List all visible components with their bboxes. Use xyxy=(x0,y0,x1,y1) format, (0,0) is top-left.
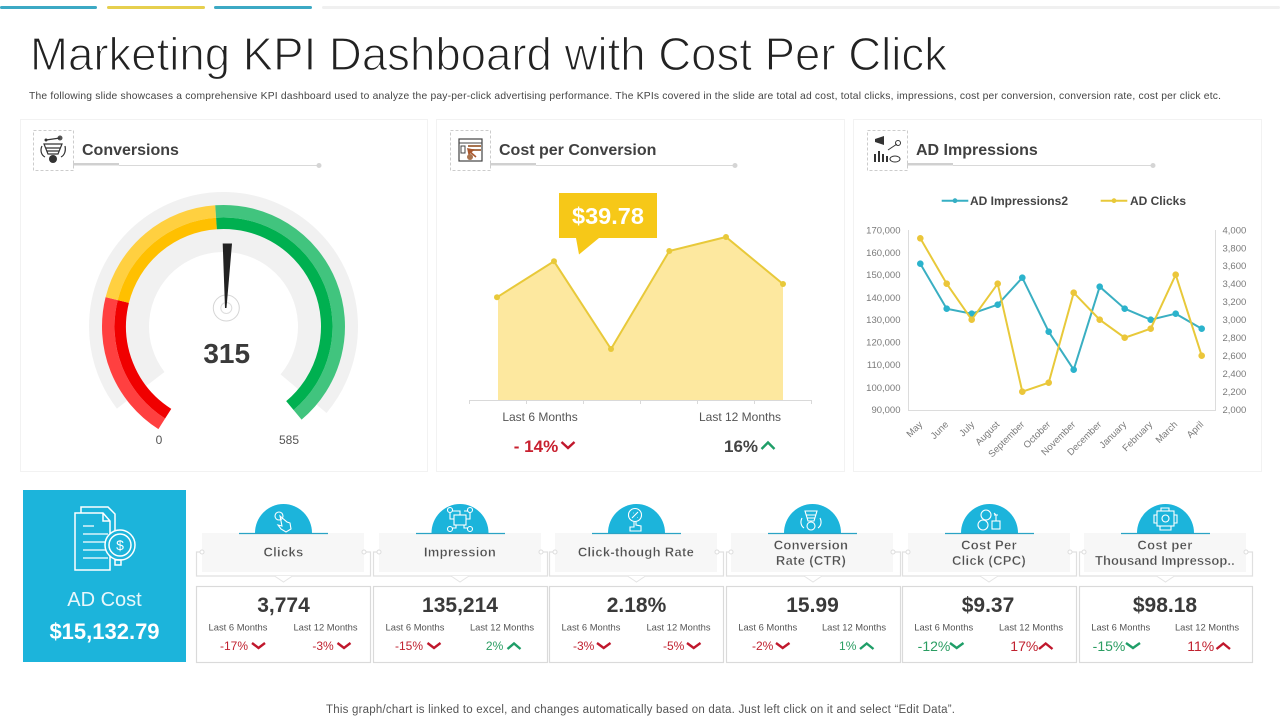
right axis labels: 3,000 xyxy=(1222,315,1246,326)
heading: cost per conversion: Cost per Conversion xyxy=(499,142,656,159)
right axis labels: 2,000 xyxy=(1222,405,1246,416)
period labels xyxy=(738,622,886,632)
panel: cost per conversion xyxy=(436,120,844,472)
label: last 6 months: Last 6 Months xyxy=(502,410,578,424)
value: $9.37 xyxy=(962,594,1014,617)
label: ad cost: AD Cost xyxy=(67,589,142,611)
month labels: November xyxy=(1039,419,1078,458)
left axis labels: 130,000 xyxy=(866,315,900,326)
period labels xyxy=(562,622,711,632)
legend: AD Clicks xyxy=(1130,194,1186,208)
card: cost per click xyxy=(902,504,1076,662)
card title xyxy=(774,538,848,568)
left axis labels: 170,000 xyxy=(866,226,900,236)
heading underline xyxy=(73,163,322,168)
changes: -15% xyxy=(395,639,423,653)
left axis labels: 150,000 xyxy=(866,270,900,281)
right axis labels: 2,200 xyxy=(1222,387,1246,398)
period labels: Last 6 Months xyxy=(738,622,797,632)
changes: 1% xyxy=(839,639,857,653)
month labels: October xyxy=(1021,419,1053,451)
period labels: Last 6 Months xyxy=(386,622,445,632)
card title: Clicks xyxy=(263,544,304,560)
series: ad clicks xyxy=(917,235,1205,395)
right axis labels: 3,600 xyxy=(1222,261,1246,272)
card title: Click-though Rate xyxy=(578,544,694,560)
month labels: February xyxy=(1120,419,1155,454)
month labels: June xyxy=(929,419,951,442)
heading underline xyxy=(490,163,738,168)
legend xyxy=(942,194,1186,208)
label: last 12 months: Last 12 Months xyxy=(699,410,781,424)
card title: Conversion xyxy=(774,538,848,552)
period labels: Last 12 Months xyxy=(470,622,534,632)
month labels: July xyxy=(957,419,977,439)
icon: puzzle xyxy=(1121,504,1210,534)
card: clicks xyxy=(196,504,370,662)
top accent bars xyxy=(0,6,1280,9)
description text: The following slide showcases a comprehensive KPI dashboard used to analyze the pay-per-click advertising performance. The KPIs covered in the slide are total ad cost, total clicks, impressions, cost per conversion, conversion rate, cost per click etc. xyxy=(29,91,1221,102)
changes: -3% xyxy=(312,639,334,653)
month labels xyxy=(905,419,1206,460)
right axis labels: 4,000 xyxy=(1222,226,1246,236)
period labels: Last 12 Months xyxy=(822,622,886,632)
callout: $39.78: $39.78 xyxy=(572,203,644,229)
card: impression xyxy=(374,504,548,662)
changes: 2% xyxy=(486,639,504,653)
changes xyxy=(220,639,350,653)
panel: conversions xyxy=(20,120,428,472)
icon: web page cursor xyxy=(450,130,490,170)
value: ad cost: $15,132.79 xyxy=(49,619,160,644)
changes xyxy=(395,639,520,653)
value: 3,774 xyxy=(257,594,310,617)
left axis labels xyxy=(866,226,900,416)
right axis labels: 3,200 xyxy=(1222,297,1246,308)
period labels: Last 6 Months xyxy=(1091,622,1150,632)
gauge min label: 0 xyxy=(156,433,163,447)
icon: network xyxy=(416,504,505,534)
right axis labels: 2,800 xyxy=(1222,333,1246,344)
changes: -15% xyxy=(1093,638,1125,654)
card title: Rate (CTR) xyxy=(776,553,846,568)
value: 15.99 xyxy=(786,594,839,617)
stat: 16 percent xyxy=(724,437,774,456)
icon: advertising xyxy=(868,130,908,170)
period labels xyxy=(1091,622,1239,632)
left axis labels: 160,000 xyxy=(866,248,900,259)
changes: 11% xyxy=(1187,638,1214,654)
icon: documents with dollar xyxy=(75,507,135,570)
period labels: Last 12 Months xyxy=(999,622,1063,632)
month labels: April xyxy=(1185,419,1206,441)
changes: -2% xyxy=(752,639,774,653)
changes xyxy=(752,639,874,653)
heading underline xyxy=(907,163,1156,168)
legend: AD Impressions2 xyxy=(970,194,1068,208)
changes: -5% xyxy=(663,639,685,653)
card title: Cost Per xyxy=(961,538,1017,552)
panel: ad impressions xyxy=(854,120,1262,472)
icon: pointer click xyxy=(239,504,328,534)
right axis labels: 2,400 xyxy=(1222,369,1246,380)
left axis labels: 90,000 xyxy=(871,405,900,416)
changes: 17% xyxy=(1010,638,1038,654)
card: conversion rate xyxy=(726,504,900,662)
period labels: Last 6 Months xyxy=(209,622,268,632)
heading: ad impressions: AD Impressions xyxy=(916,142,1038,159)
changes: -12% xyxy=(918,638,950,654)
left axis labels: 140,000 xyxy=(866,293,900,304)
icon: percent hand xyxy=(592,504,681,534)
period labels xyxy=(914,622,1063,632)
line chart xyxy=(866,226,1246,460)
value: $98.18 xyxy=(1133,594,1197,617)
icon: coins xyxy=(945,504,1034,534)
right axis labels: 3,800 xyxy=(1222,244,1246,254)
title: Marketing KPI Dashboard with Cost Per Click xyxy=(30,28,948,80)
left axis labels: 110,000 xyxy=(867,360,900,371)
period labels: Last 12 Months xyxy=(1175,622,1239,632)
card title: Impression xyxy=(424,544,496,560)
card title xyxy=(1095,538,1235,568)
value: 2.18% xyxy=(607,594,667,617)
changes: -17% xyxy=(220,639,248,653)
card: click-through rate xyxy=(550,504,724,662)
card title: Cost per xyxy=(1137,538,1193,552)
gauge chart xyxy=(108,211,339,424)
left axis labels: 120,000 xyxy=(866,337,900,348)
period labels: Last 6 Months xyxy=(562,622,621,632)
period labels xyxy=(209,622,358,632)
left axis labels: 100,000 xyxy=(866,383,900,394)
month labels: August xyxy=(973,419,1002,448)
gauge value: 315 xyxy=(203,338,250,369)
right axis labels: 3,400 xyxy=(1222,279,1246,290)
footer note: This graph/chart is linked to excel, and changes automatically based on data. Just left click on it and select “Edit Data”. xyxy=(326,704,955,716)
right axis labels xyxy=(1222,226,1246,416)
value: 135,214 xyxy=(422,594,498,617)
gauge needle xyxy=(213,244,239,321)
changes xyxy=(573,639,700,653)
card title: Thousand Impressop.. xyxy=(1095,553,1235,568)
month labels: December xyxy=(1065,419,1104,458)
right axis labels: 2,600 xyxy=(1222,351,1246,362)
month labels: March xyxy=(1154,419,1180,446)
area chart xyxy=(470,234,812,404)
card title: Click (CPC) xyxy=(952,553,1026,568)
stat: minus 14 percent: - 14% xyxy=(514,437,558,456)
icon: funnel xyxy=(768,504,857,534)
period labels: Last 6 Months xyxy=(914,622,973,632)
changes xyxy=(918,638,1052,654)
month labels: September xyxy=(986,419,1027,460)
period labels: Last 12 Months xyxy=(646,622,711,632)
gauge max label: 585 xyxy=(279,433,299,447)
month labels: May xyxy=(905,419,925,440)
stat: 16 percent: 16% xyxy=(724,437,758,456)
heading: conversions: Conversions xyxy=(82,142,179,159)
card: cost per thousand xyxy=(1080,504,1252,662)
period labels: Last 12 Months xyxy=(293,622,358,632)
card title xyxy=(952,538,1026,568)
icon: conversion funnel xyxy=(34,130,74,170)
callout: $39.78 xyxy=(559,193,657,254)
period labels xyxy=(386,622,534,632)
panel: ad cost xyxy=(23,490,186,662)
series: ad impressions xyxy=(917,260,1205,373)
icon: documents with dollar: $ xyxy=(116,537,124,553)
changes: -3% xyxy=(573,639,595,653)
changes xyxy=(1093,638,1230,654)
month labels: January xyxy=(1097,419,1129,451)
